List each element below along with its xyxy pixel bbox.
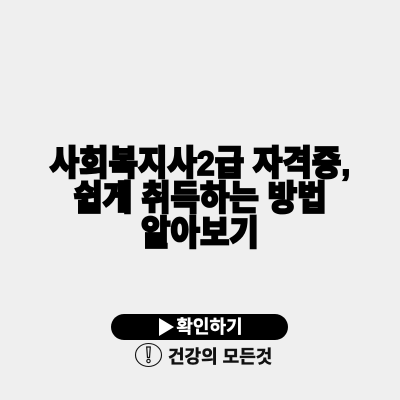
title [48, 144, 350, 252]
title: 쉽게 취득하는 방법 [73, 179, 327, 217]
brand label: 건강의 모든것 [168, 347, 272, 367]
title: 사회복지사2급 자격증, [50, 144, 350, 182]
title: 알아보기 [141, 214, 259, 252]
button: confirm: 확인하기 [176, 317, 243, 337]
icon: exclamation circle [134, 343, 162, 367]
button: confirm [111, 314, 288, 340]
